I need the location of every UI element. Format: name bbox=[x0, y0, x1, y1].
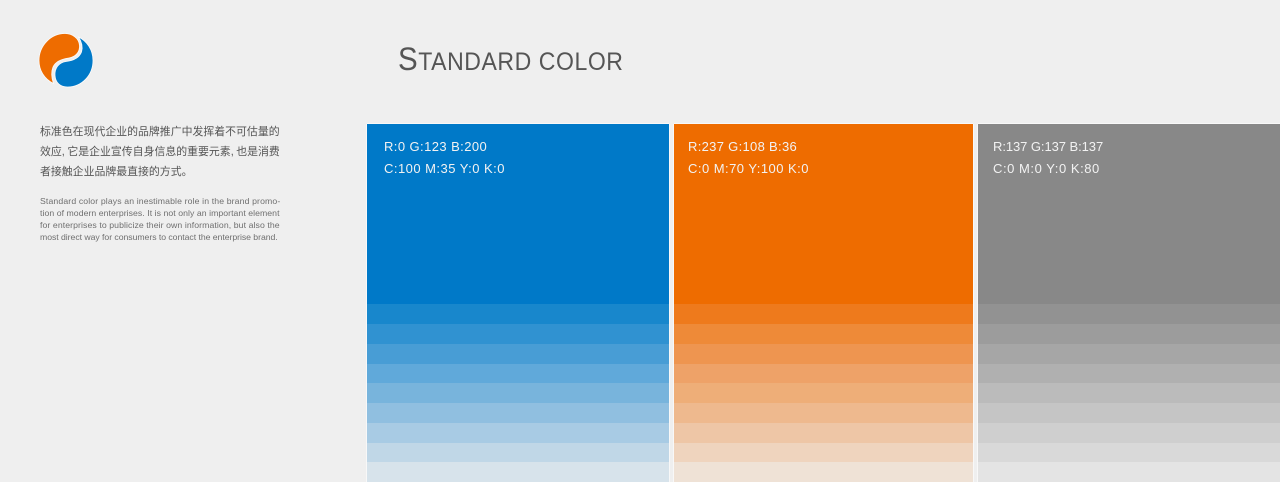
text block: English description: tion of modern enterprises. It is not only an important element bbox=[40, 208, 280, 218]
text block: English description bbox=[40, 196, 280, 242]
logo orange half bbox=[39, 34, 80, 84]
gray color values: C:0 M:0 Y:0 K:80 bbox=[993, 161, 1100, 176]
text block: Chinese description bbox=[40, 126, 280, 178]
icon: logo bbox=[38, 33, 94, 88]
text block: English description: most direct way for consumers to contact the enterprise brand. bbox=[40, 232, 278, 242]
panel: orange bbox=[674, 124, 973, 482]
gray color values bbox=[993, 139, 1103, 176]
panel: gray bbox=[978, 124, 1280, 482]
gray color values: R:137 G:137 B:137 bbox=[993, 139, 1103, 154]
orange color values: R:237 G:108 B:36 bbox=[688, 139, 797, 154]
blue color values bbox=[384, 139, 505, 176]
text block: Chinese description: 标准色在现代企业的品牌推广中发挥着不可估量的 bbox=[40, 126, 280, 138]
text block: English description: Standard color plays an inestimable role in the brand promo- bbox=[40, 196, 280, 206]
blue color values: C:100 M:35 Y:0 K:0 bbox=[384, 161, 505, 176]
panel: blue bbox=[367, 124, 669, 482]
gray tint scale bbox=[978, 304, 1280, 482]
title: STANDARD COLOR bbox=[398, 41, 624, 77]
orange color values: C:0 M:70 Y:100 K:0 bbox=[688, 161, 809, 176]
text block: Chinese description: 者接触企业品牌最直接的方式。 bbox=[40, 166, 192, 178]
orange tint scale bbox=[674, 304, 973, 482]
logo blue half bbox=[55, 37, 93, 87]
blue tint scale bbox=[367, 304, 669, 482]
blue color values: R:0 G:123 B:200 bbox=[384, 139, 487, 154]
text block: English description: for enterprises to publicize their own information, but also the bbox=[40, 220, 280, 230]
text block: Chinese description: 效应,它是企业宣传自身信息的重要元素,也是消费 bbox=[40, 146, 280, 158]
orange color values bbox=[688, 139, 809, 176]
